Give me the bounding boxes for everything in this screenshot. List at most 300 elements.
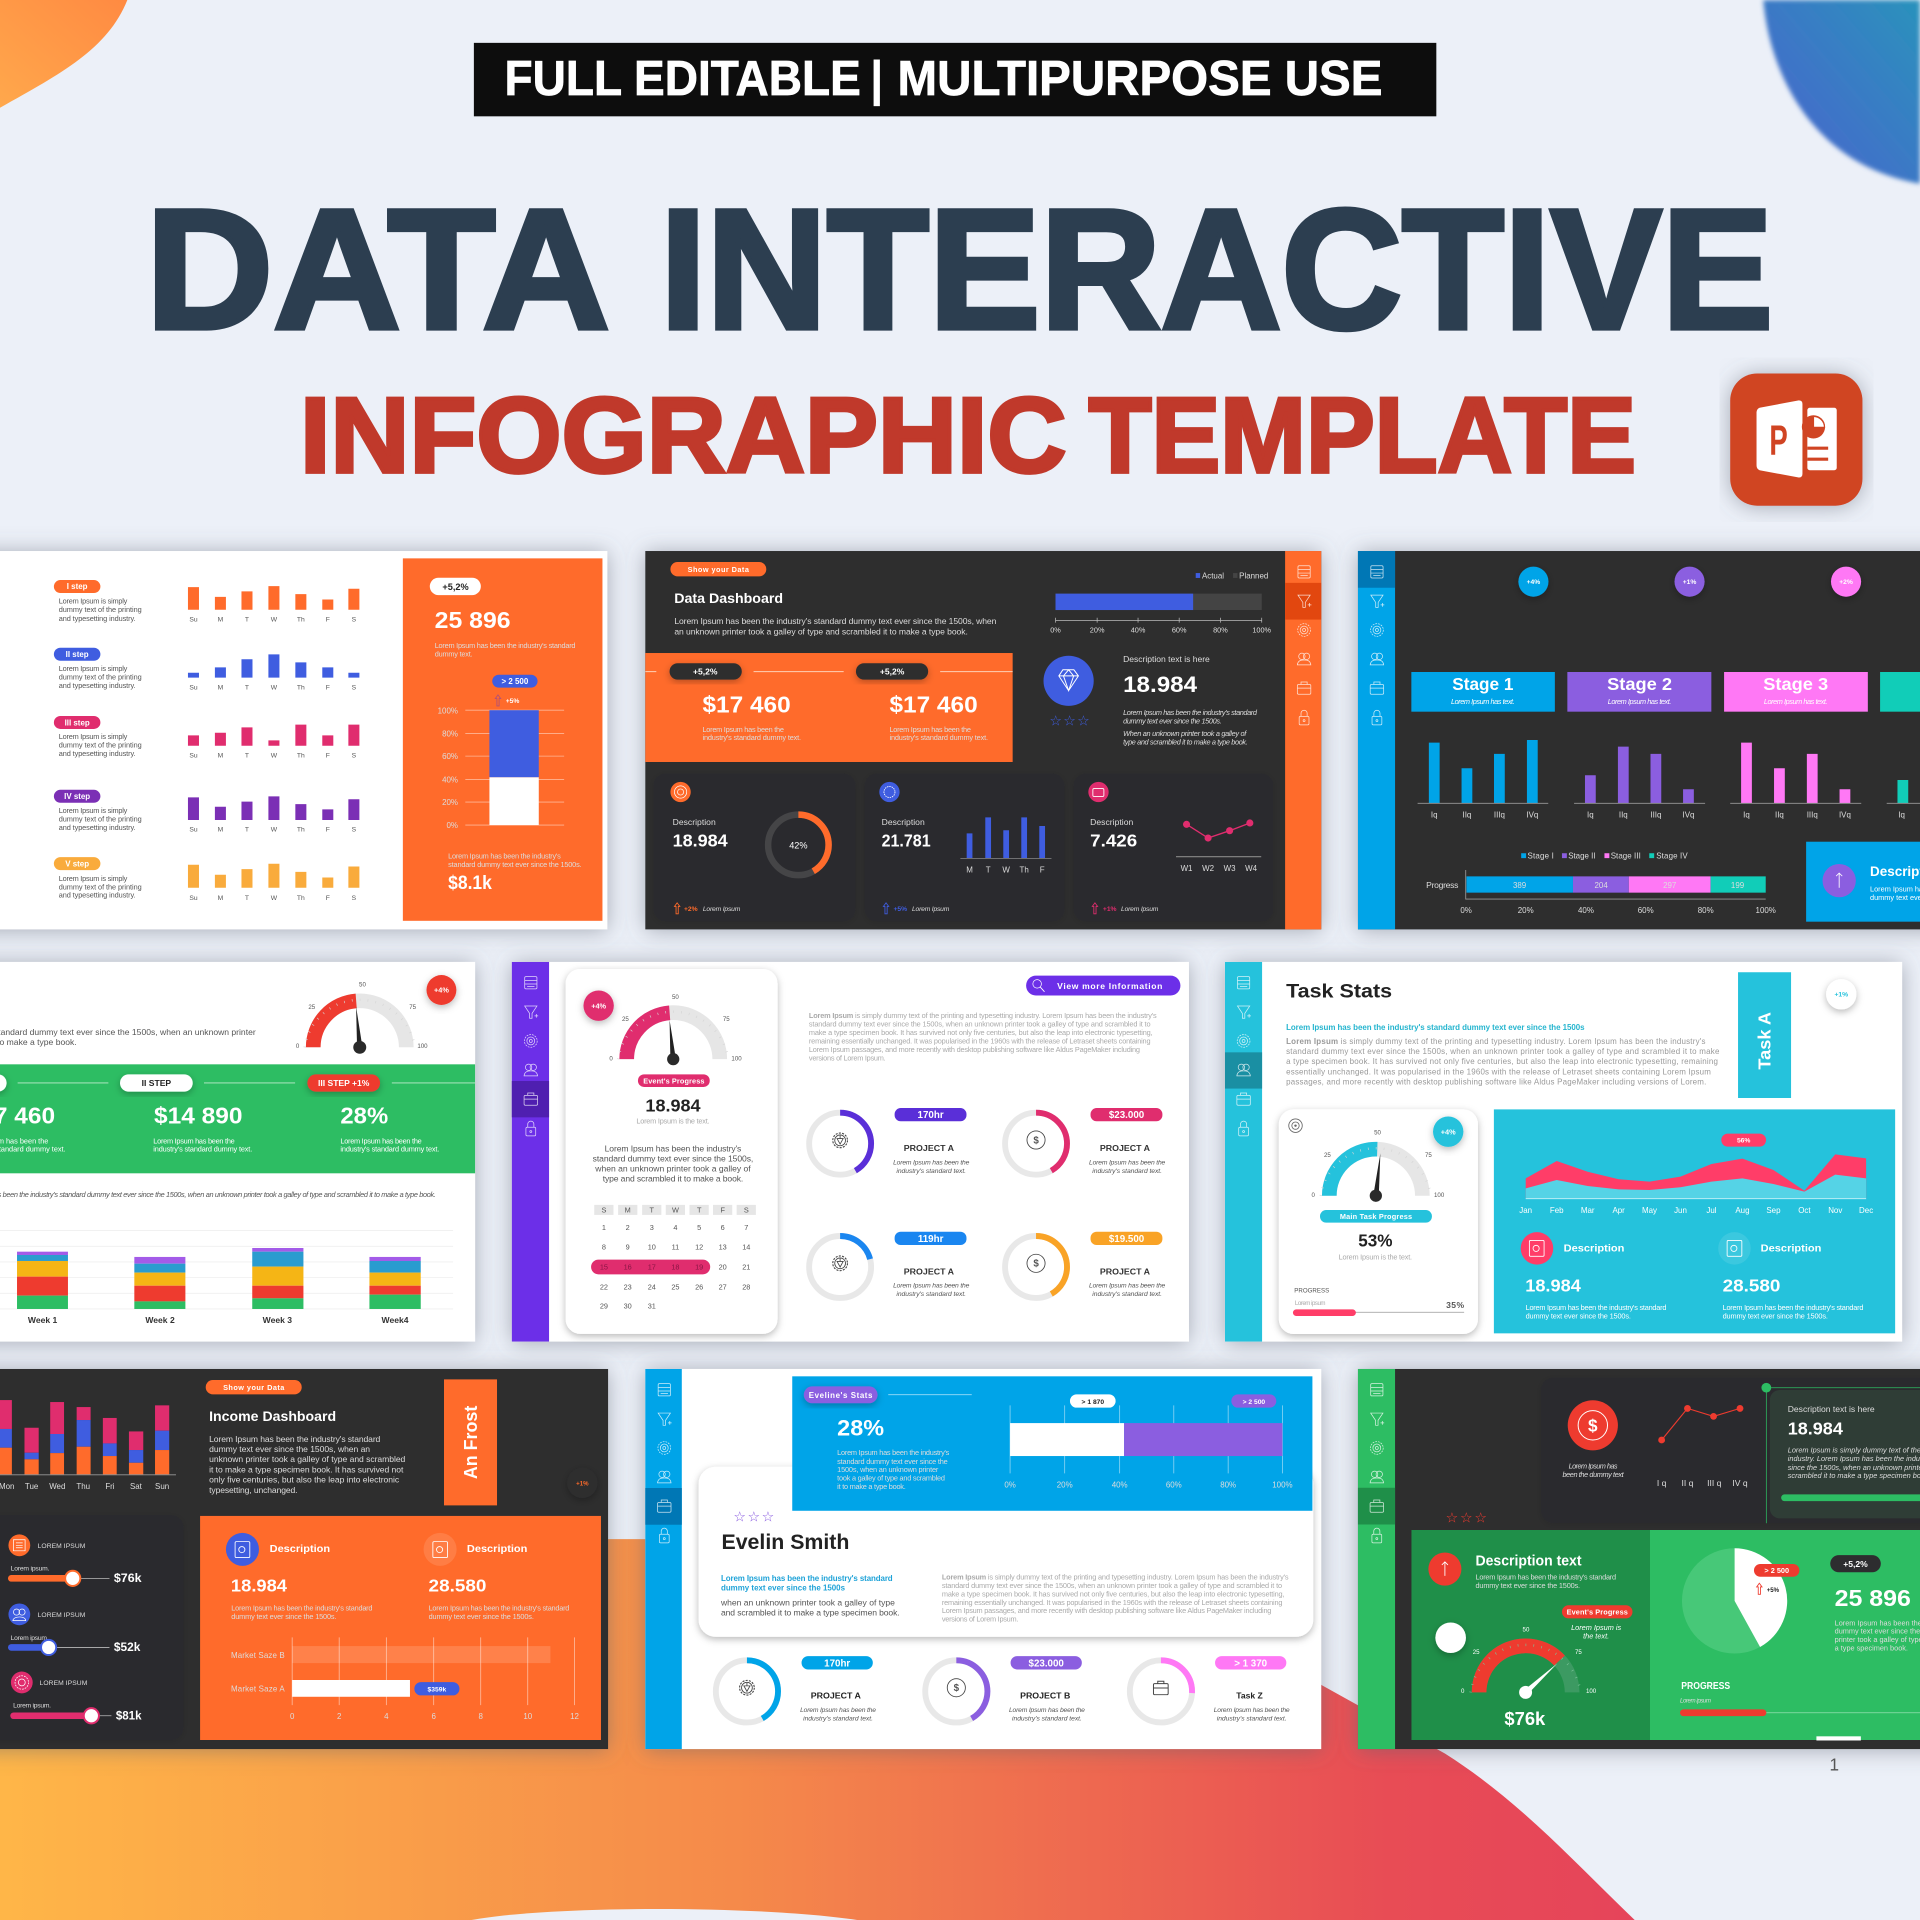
step III row: T bbox=[245, 753, 249, 760]
badges: stage changes: +4% bbox=[1527, 579, 1540, 586]
gauge: red on green: 25 bbox=[1473, 1649, 1480, 1656]
stacked percent bar: 0% bbox=[1004, 1480, 1016, 1489]
pie chart bbox=[1682, 1548, 1799, 1654]
stat: description 28.580: 28.580 bbox=[1723, 1276, 1780, 1296]
body text: when an unknown printer took a galley of bbox=[594, 1163, 751, 1173]
orange summary column: standard dummy text ever since the 1500s. bbox=[448, 860, 582, 869]
stage 2 column: IIIq bbox=[1650, 811, 1661, 820]
paragraph: Lorem Ipsum is simply dummy text of the printing and typesetting industry. Lorem Ipsum has been the industry's bbox=[809, 1011, 1157, 1020]
project A: PROJECT A bbox=[811, 1690, 861, 1700]
step III row: Su bbox=[189, 753, 198, 760]
card: task progress: Lorem ipsum bbox=[1295, 1300, 1326, 1307]
title: data interactive bbox=[146, 174, 1773, 365]
green KPI band: Lorem Ipsum has been the bbox=[153, 1136, 235, 1145]
sidebar: blue bbox=[1358, 551, 1395, 929]
orange summary column: Lorem Ipsum has been the industry's bbox=[448, 851, 561, 860]
card: profile: and scrambled it to make a type specimen book. bbox=[721, 1607, 900, 1617]
stage 3 column: Lorem Ipsum has text. bbox=[1764, 697, 1828, 706]
step III row bbox=[54, 716, 357, 760]
panel: eveline's stats: it to make a type book. bbox=[837, 1482, 906, 1491]
card: donut 42%: 42% bbox=[789, 840, 808, 850]
step I row: T bbox=[245, 617, 249, 624]
step II row: Th bbox=[297, 685, 305, 692]
step I row: and typesetting industry. bbox=[59, 614, 136, 623]
project: 119hr: Lorem Ipsum has been the bbox=[893, 1282, 970, 1289]
step I row: Th bbox=[297, 617, 305, 624]
paragraph: it to make a type specimen book. It has survived not bbox=[209, 1464, 404, 1474]
callout: description bbox=[1806, 842, 1920, 922]
calendar: 2 bbox=[626, 1223, 630, 1232]
project: $19.500: $ bbox=[1033, 1259, 1039, 1270]
calendar: 4 bbox=[673, 1223, 677, 1232]
panel: evelin smith (white / blue) bbox=[645, 1369, 1321, 1749]
card: task progress: Main Task Progress bbox=[1340, 1212, 1412, 1221]
area chart: Jun bbox=[1674, 1206, 1687, 1215]
orange summary column: 100% bbox=[438, 706, 458, 715]
step II row: W bbox=[271, 685, 278, 692]
card: line chart 7.426: 7.426 bbox=[1090, 831, 1137, 851]
task Z bbox=[1130, 1656, 1290, 1723]
subtitle: infographic template: TEMPLATE bbox=[1089, 376, 1636, 495]
step II row: T bbox=[245, 685, 249, 692]
slider: $81k bbox=[10, 1672, 142, 1723]
project B: $ bbox=[954, 1683, 960, 1694]
stacked percent bar: > 1 870 bbox=[1082, 1399, 1104, 1406]
calendar: 31 bbox=[648, 1302, 656, 1311]
orange summary column bbox=[403, 558, 602, 921]
panel: eveline's stats: Eveline's Stats bbox=[809, 1391, 873, 1400]
card: donut 42%: 18.984 bbox=[673, 831, 728, 851]
gauge: red: 100 bbox=[417, 1043, 428, 1050]
calendar: 11 bbox=[672, 1243, 679, 1252]
calendar: S bbox=[601, 1206, 606, 1215]
stat: description 18.984: 18.984 bbox=[1525, 1276, 1581, 1296]
paragraph: versions of Lorem Ipsum. bbox=[809, 1053, 886, 1062]
gauge: red on green: 0 bbox=[1461, 1688, 1465, 1695]
card: line chart 7.426 bbox=[1073, 773, 1273, 922]
gauge: red on green: 100 bbox=[1586, 1688, 1597, 1695]
stacked percent bar: > 2 500 bbox=[1243, 1399, 1265, 1406]
card: profile: Lorem Ipsum has been the industry's standard bbox=[721, 1574, 893, 1583]
area chart: Feb bbox=[1550, 1206, 1564, 1215]
paragraph: a type specimen book. It has survived not only five centuries, but also the leap into electronic typesetting, remaining bbox=[1286, 1057, 1718, 1066]
calendar: 13 bbox=[719, 1243, 727, 1252]
project A: industry's standard text. bbox=[803, 1716, 873, 1723]
project B: Lorem Ipsum has been the bbox=[1009, 1707, 1085, 1714]
decorative gradient wave bottom bbox=[0, 1539, 1635, 1920]
paragraph bbox=[1286, 1037, 1720, 1087]
step III row: M bbox=[218, 753, 224, 760]
panel: event progress and projects (white / purple) bbox=[512, 962, 1189, 1342]
panel: green pie and stats: PROGRESS bbox=[1681, 1681, 1731, 1692]
step II row: S bbox=[352, 685, 357, 692]
project A: 170hr bbox=[824, 1658, 850, 1669]
panel: dark green gauge: Event's Progress bbox=[1567, 1608, 1628, 1617]
sidebar: blue bbox=[645, 1369, 682, 1749]
stacked progress chart: 0% bbox=[1460, 906, 1472, 915]
step IV row: W bbox=[271, 827, 278, 834]
intro text: Lorem Ipsum has been the industry's standard dummy text ever since the 1500s, when bbox=[674, 616, 997, 626]
card: profile: ☆☆☆ bbox=[733, 1510, 774, 1526]
calendar: 20 bbox=[719, 1262, 727, 1271]
gauge: red on green: 75 bbox=[1575, 1649, 1582, 1656]
green KPI band: $14 890 bbox=[154, 1102, 242, 1128]
panel: steps and gauge (white / green) bbox=[0, 962, 475, 1342]
stat: description 28.580: Description bbox=[467, 1544, 527, 1555]
subheading: Lorem Ipsum has been the industry's standard dummy text ever since the 1500s bbox=[1286, 1023, 1585, 1032]
badge: +4% bbox=[583, 990, 614, 1021]
step V row: S bbox=[352, 895, 357, 902]
chart: market size bbox=[231, 1637, 580, 1721]
progress bar: actual vs planned: Actual bbox=[1202, 572, 1224, 581]
calendar: 24 bbox=[648, 1282, 656, 1291]
stacked progress chart: 60% bbox=[1638, 906, 1654, 915]
stacked bar chart: weekdays: Fri bbox=[105, 1482, 115, 1491]
card: task progress: 53% bbox=[1358, 1231, 1392, 1251]
stacked bar chart: weekdays: Wed bbox=[49, 1482, 65, 1491]
orange KPI band: +5,2% bbox=[693, 667, 718, 677]
panel: eveline's stats: 1500s, when an unknown printer bbox=[837, 1465, 939, 1474]
description: 18.984: dummy text ever since the 1500s. bbox=[1123, 717, 1222, 726]
description: 18.984: type and scrambled it to make a type book. bbox=[1123, 737, 1248, 746]
area chart: Sep bbox=[1766, 1206, 1781, 1215]
paragraph: passages, and more recently with desktop publishing software like Aldus PageMaker including versions of Lorem. bbox=[1286, 1078, 1706, 1087]
chart: market size: $359k bbox=[428, 1687, 447, 1694]
calendar: 21 bbox=[742, 1262, 750, 1271]
green KPI band: III STEP +1% bbox=[318, 1078, 370, 1088]
card: line chart 7.426: +1% bbox=[1103, 906, 1117, 913]
pill: show your data: Show your Data bbox=[688, 565, 750, 574]
card: task progress: PROGRESS bbox=[1294, 1287, 1330, 1294]
card: bar chart 21.781: T bbox=[986, 866, 991, 875]
calendar: 25 bbox=[671, 1282, 680, 1291]
step IV row: Th bbox=[297, 827, 305, 834]
area chart: Jul bbox=[1706, 1206, 1717, 1215]
heading: data dashboard: Data Dashboard bbox=[674, 590, 783, 606]
paragraph bbox=[809, 1011, 1157, 1062]
panel: orange stats and market size bbox=[200, 1516, 601, 1740]
body text: type and scrambled it to make a book. bbox=[603, 1173, 743, 1183]
gauge: cyan: 25 bbox=[1324, 1152, 1331, 1159]
step IV row: M bbox=[218, 827, 224, 834]
step V row: V step bbox=[65, 859, 89, 868]
task Z: Task Z bbox=[1236, 1690, 1263, 1700]
card: money and line chart: $ bbox=[1588, 1415, 1598, 1435]
orange KPI band: industry's standard dummy text. bbox=[889, 733, 988, 742]
heading: task stats: Task Stats bbox=[1286, 981, 1392, 1003]
step IV row: IV step bbox=[64, 792, 90, 801]
step II row: and typesetting industry. bbox=[59, 681, 136, 690]
slider: $76k: LOREM IPSUM bbox=[38, 1543, 86, 1550]
step II row: M bbox=[218, 685, 224, 692]
step V row: and typesetting industry. bbox=[59, 891, 136, 900]
orange KPI band: Lorem Ipsum has been the bbox=[702, 725, 784, 734]
pill: show your data bbox=[206, 1380, 302, 1394]
progress bar: actual vs planned: 60% bbox=[1172, 625, 1187, 634]
step I row: Lorem Ipsum is simply bbox=[59, 597, 128, 606]
stacked percent bar bbox=[1004, 1394, 1293, 1489]
project: $23.000: PROJECT A bbox=[1100, 1143, 1150, 1153]
chart: market size: 4 bbox=[384, 1712, 389, 1721]
panel: description and progress (dark / green) bbox=[1358, 1369, 1920, 1749]
stage 2 column bbox=[1567, 672, 1711, 820]
badges: stage changes: +2% bbox=[1839, 579, 1853, 586]
card: line chart 7.426: W4 bbox=[1245, 864, 1258, 873]
step V row: T bbox=[245, 895, 249, 902]
description: 18.984: 18.984 bbox=[1123, 672, 1198, 697]
gauge: red: 25 bbox=[308, 1004, 316, 1011]
stage 2 column: Iq bbox=[1587, 811, 1594, 820]
panel: eveline's stats: standard dummy text ever since the bbox=[837, 1457, 948, 1466]
step V row: M bbox=[218, 895, 224, 902]
stat: description 28.580: dummy text ever since the 1500s. bbox=[1723, 1311, 1828, 1320]
project: 170hr: PROJECT A bbox=[904, 1143, 954, 1153]
gauge: cyan: 75 bbox=[1425, 1152, 1432, 1159]
stacked progress chart: Stage II bbox=[1568, 852, 1596, 861]
step I row bbox=[54, 580, 357, 624]
stage 4 column bbox=[1880, 672, 1920, 820]
button: view more information: View more Information bbox=[1057, 981, 1162, 991]
card: line chart 7.426: W3 bbox=[1224, 864, 1236, 873]
sidebar: green bbox=[1358, 1369, 1395, 1749]
badge: +1%: +1% bbox=[576, 1480, 589, 1487]
area chart: Jan bbox=[1519, 1206, 1532, 1215]
project B: industry's standard text. bbox=[1012, 1716, 1082, 1723]
stacked percent bar: 20% bbox=[1057, 1480, 1073, 1489]
orange summary column: 40% bbox=[442, 775, 458, 784]
stacked progress chart: 297 bbox=[1663, 881, 1677, 890]
stage 2 column: Stage 2 bbox=[1607, 674, 1672, 694]
card: bar chart 21.781 bbox=[864, 773, 1065, 922]
project: $23.000 bbox=[1005, 1108, 1166, 1175]
page number: 1 bbox=[1830, 1755, 1839, 1775]
calendar: 17 bbox=[648, 1262, 656, 1271]
paragraph: essentially unchanged. It was popularised in the 1960s with the release of Letraset sheets containing Lorem Ipsum bbox=[1286, 1068, 1711, 1077]
slider: $76k bbox=[8, 1534, 142, 1586]
area chart: Aug bbox=[1735, 1206, 1750, 1215]
card: sliders bbox=[0, 1515, 184, 1740]
step II row: II step bbox=[66, 650, 89, 659]
stat: description 28.580 bbox=[424, 1533, 569, 1621]
paragraph: unknown printer took a galley of type and scrambled bbox=[209, 1454, 406, 1464]
gauge: red on green: 50 bbox=[1523, 1626, 1530, 1633]
area chart: Dec bbox=[1859, 1206, 1873, 1215]
step II row: F bbox=[326, 685, 330, 692]
calendar: 12 bbox=[695, 1243, 703, 1252]
paragraph: remaining essentially unchanged. It was popularised in the 1960s with the release of Letraset sheets containing bbox=[942, 1598, 1282, 1607]
project: 119hr: industry's standard text. bbox=[896, 1291, 966, 1298]
value: 18.984: 18.984 bbox=[645, 1096, 701, 1116]
progress bar: actual vs planned: 100% bbox=[1252, 625, 1272, 634]
orange KPI band bbox=[645, 653, 1013, 762]
task Z: > 1 370 bbox=[1234, 1658, 1268, 1669]
progress bar: actual vs planned: 20% bbox=[1090, 625, 1105, 634]
step I row: M bbox=[218, 617, 224, 624]
project: 170hr: industry's standard text. bbox=[896, 1168, 966, 1175]
card: donut 42%: Description bbox=[673, 817, 716, 827]
card: bar chart 21.781: +5% bbox=[894, 906, 907, 913]
calendar: 5 bbox=[697, 1223, 701, 1232]
title: data interactive: DATA bbox=[146, 174, 610, 365]
stat: description 18.984: Description bbox=[270, 1544, 330, 1555]
calendar: 1 bbox=[602, 1223, 606, 1232]
area chart: Mar bbox=[1581, 1206, 1595, 1215]
project: $19.500 bbox=[1005, 1232, 1166, 1298]
stars: ☆☆☆ bbox=[1446, 1511, 1487, 1527]
step I row: Su bbox=[189, 617, 198, 624]
project: $23.000: $23.000 bbox=[1109, 1110, 1145, 1121]
card: money and line chart: I q bbox=[1657, 1478, 1667, 1488]
orange KPI band: $17 460 bbox=[702, 691, 791, 717]
chart: market size: 2 bbox=[337, 1712, 342, 1721]
panel: green pie and stats: 25 896 bbox=[1835, 1585, 1911, 1611]
project B: PROJECT B bbox=[1020, 1690, 1070, 1700]
green KPI band bbox=[0, 1064, 475, 1173]
panel: dark green gauge: Description text bbox=[1476, 1553, 1582, 1569]
stacked bar chart: weeks: Week4 bbox=[382, 1315, 409, 1325]
orange summary column: +5,2% bbox=[442, 582, 469, 592]
pill: event's progress: Event's Progress bbox=[643, 1076, 704, 1085]
project: 119hr bbox=[809, 1232, 970, 1298]
calendar: 26 bbox=[695, 1282, 703, 1291]
body text bbox=[593, 1143, 753, 1183]
orange summary column: 60% bbox=[442, 752, 458, 761]
card: money and line chart: Lorem Ipsum has bbox=[1569, 1461, 1618, 1470]
gauge: cyan bbox=[1312, 1129, 1445, 1202]
icon: powerpoint bbox=[1730, 373, 1862, 506]
chart: market size: 6 bbox=[432, 1712, 437, 1721]
paragraph bbox=[209, 1434, 406, 1495]
step III row: W bbox=[271, 753, 278, 760]
paragraph: versions of Lorem Ipsum. bbox=[942, 1614, 1018, 1623]
stage 1 column: Lorem Ipsum has text. bbox=[1451, 697, 1515, 706]
orange summary column: Lorem Ipsum has been the industry's standard bbox=[435, 641, 576, 650]
step IV row bbox=[54, 790, 357, 834]
area chart: 56% bbox=[1737, 1138, 1750, 1145]
stage 2 column: Lorem Ipsum has text. bbox=[1608, 697, 1671, 706]
slider: $52k: Lorem ipsum. bbox=[11, 1635, 49, 1642]
sidebar: orange bbox=[1285, 551, 1321, 929]
paragraph: Lorem Ipsum is simply dummy text of the printing and typesetting industry. Lorem Ipsum has been the industry's bbox=[942, 1572, 1289, 1581]
calendar: 15 bbox=[600, 1262, 608, 1271]
panel: eveline's stats bbox=[792, 1376, 1312, 1511]
chart: market size: 8 bbox=[479, 1712, 484, 1721]
chart: market size: Market Saze A bbox=[231, 1684, 285, 1693]
calendar: S bbox=[744, 1206, 749, 1215]
calendar: F bbox=[720, 1206, 725, 1215]
stat: description 18.984 bbox=[1521, 1232, 1666, 1320]
stage 3 column: IVq bbox=[1839, 811, 1851, 820]
project: $19.500: industry's standard text. bbox=[1092, 1291, 1162, 1298]
stage 1 column: Iq bbox=[1431, 811, 1438, 820]
panel: task stats (white / cyan) bbox=[1225, 962, 1902, 1342]
calendar: 22 bbox=[600, 1282, 608, 1291]
paragraph: make a type specimen book. It has survived not only five centuries, but also the leap into electronic typesetting, bbox=[809, 1028, 1153, 1037]
panel: dark green gauge: the text. bbox=[1583, 1632, 1609, 1641]
stat: description 28.580: dummy text ever since the 1500s. bbox=[429, 1612, 534, 1621]
area chart: Oct bbox=[1798, 1206, 1811, 1215]
panel: income dashboard (dark / orange) bbox=[0, 1369, 608, 1749]
intro text bbox=[674, 616, 997, 636]
badge: +4%: +4% bbox=[591, 1001, 607, 1010]
gauge: pink: 75 bbox=[723, 1016, 730, 1023]
stacked bar chart: weeks: Week 1 bbox=[28, 1315, 58, 1325]
panel: green pie and stats: +5,2% bbox=[1843, 1559, 1868, 1569]
calendar: 19 bbox=[695, 1262, 703, 1271]
chart: market size: 10 bbox=[523, 1712, 533, 1721]
card: task progress bbox=[1279, 1109, 1478, 1334]
chart: market size: Market Saze B bbox=[231, 1651, 285, 1660]
paragraph: only five centuries, but also the leap into electronic bbox=[209, 1475, 400, 1485]
paragraph: Lorem Ipsum passages, and more recently with desktop publishing software like Aldus PageMaker including bbox=[942, 1606, 1271, 1615]
panel: green pie and stats: a type specimen book. bbox=[1835, 1644, 1908, 1653]
project: $19.500: Lorem Ipsum has been the bbox=[1089, 1282, 1166, 1289]
stage 3 column: IIIq bbox=[1807, 811, 1818, 820]
step II row: Su bbox=[189, 685, 198, 692]
banner: full editable: FULL EDITABLE bbox=[504, 52, 861, 106]
icon: diamond with stars bbox=[1044, 656, 1094, 730]
icon: diamond with stars: ☆☆☆ bbox=[1049, 714, 1090, 730]
gauge: pink: 25 bbox=[622, 1016, 629, 1023]
card: bar chart 21.781: M bbox=[966, 866, 973, 875]
card: description 18.984 bbox=[1761, 1383, 1920, 1523]
card: money and line chart: been the dummy text bbox=[1562, 1470, 1625, 1479]
stat: description 18.984: 18.984 bbox=[231, 1576, 288, 1596]
slider: $81k: LOREM IPSUM bbox=[40, 1680, 88, 1687]
card: task progress: +4% bbox=[1441, 1127, 1456, 1136]
gauge: red: 0 bbox=[296, 1043, 300, 1050]
pill: show your data bbox=[670, 562, 766, 576]
card: money and line chart: IV q bbox=[1732, 1478, 1748, 1488]
step V row: W bbox=[271, 895, 278, 902]
orange KPI band: +5,2% bbox=[880, 667, 905, 677]
stat: description 28.580: Description bbox=[1761, 1243, 1821, 1254]
card: line chart 7.426: Description bbox=[1090, 817, 1133, 827]
stat: description 18.984: Lorem Ipsum has been the industry's standard bbox=[1526, 1303, 1666, 1312]
card: bar chart 21.781: Lorem Ipsum bbox=[912, 906, 950, 913]
progress bar: actual vs planned: Planned bbox=[1239, 572, 1268, 581]
step III row: Th bbox=[297, 753, 305, 760]
stage 1 column: IIIq bbox=[1494, 811, 1505, 820]
panel: dark green gauge: dummy text ever since the 1500s. bbox=[1476, 1581, 1580, 1590]
gauge: cyan: 50 bbox=[1374, 1129, 1382, 1136]
gauge: red on green bbox=[1461, 1626, 1597, 1699]
stacked progress chart: Progress bbox=[1426, 880, 1458, 890]
stacked percent bar: 100% bbox=[1272, 1480, 1293, 1489]
badge: +1%: +1% bbox=[1834, 992, 1848, 999]
card: bar chart 21.781: W bbox=[1002, 866, 1010, 875]
stacked bar chart: weeks: Week 3 bbox=[263, 1315, 292, 1325]
stacked bar chart: weekdays: Sat bbox=[130, 1482, 143, 1491]
banner: full editable bbox=[474, 43, 1436, 116]
italic note: s been the industry's standard dummy text ever since the 1500s, when an unknown printer took a galley of type and scrambled it to make a type book. bbox=[0, 1190, 436, 1199]
gauge: red: 75 bbox=[409, 1004, 417, 1011]
slider: $76k: $76k bbox=[114, 1571, 142, 1585]
panel: weekly steps (white / orange) bbox=[0, 551, 607, 929]
subtitle: infographic template bbox=[300, 376, 1636, 495]
paragraph: standard dummy text ever since the 1500s, when an unknown printer took a galley of type and scrambled it to make bbox=[1286, 1047, 1720, 1056]
calendar: T bbox=[697, 1206, 702, 1215]
project B: $23.000 bbox=[1029, 1658, 1064, 1669]
step V row: Th bbox=[297, 895, 305, 902]
calendar: 3 bbox=[650, 1223, 654, 1232]
card: donut 42%: +2% bbox=[684, 906, 698, 913]
slider: $52k bbox=[8, 1603, 141, 1655]
step I row: dummy text of the printing bbox=[59, 605, 142, 614]
stacked bar chart: weeks bbox=[0, 1231, 453, 1325]
gauge: red: 50 bbox=[359, 981, 366, 988]
stage 1 column: Stage 1 bbox=[1452, 674, 1514, 694]
